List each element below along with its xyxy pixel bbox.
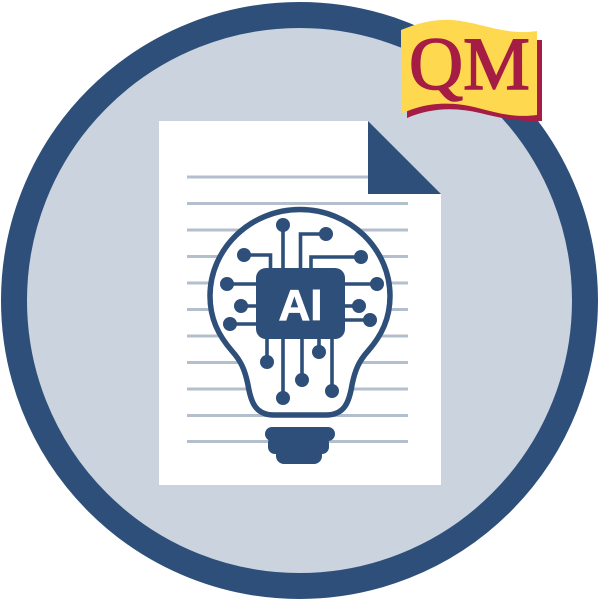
document page: [159, 121, 441, 485]
circuit traces: [227, 225, 377, 398]
chip label: AI: [278, 281, 322, 330]
folded corner: [368, 121, 441, 194]
icon: AI light bulb: [210, 210, 390, 464]
page sheet: [159, 121, 441, 485]
bulb outline: [210, 210, 390, 415]
bulb base: [265, 427, 335, 464]
QM wordmark: QM: [409, 23, 530, 106]
flag banner: [401, 20, 537, 116]
text lines: [187, 177, 408, 442]
flag shadow: [407, 40, 542, 121]
circuit nodes: [220, 218, 384, 405]
QM logo flag: [401, 20, 542, 121]
chip: [256, 268, 345, 339]
